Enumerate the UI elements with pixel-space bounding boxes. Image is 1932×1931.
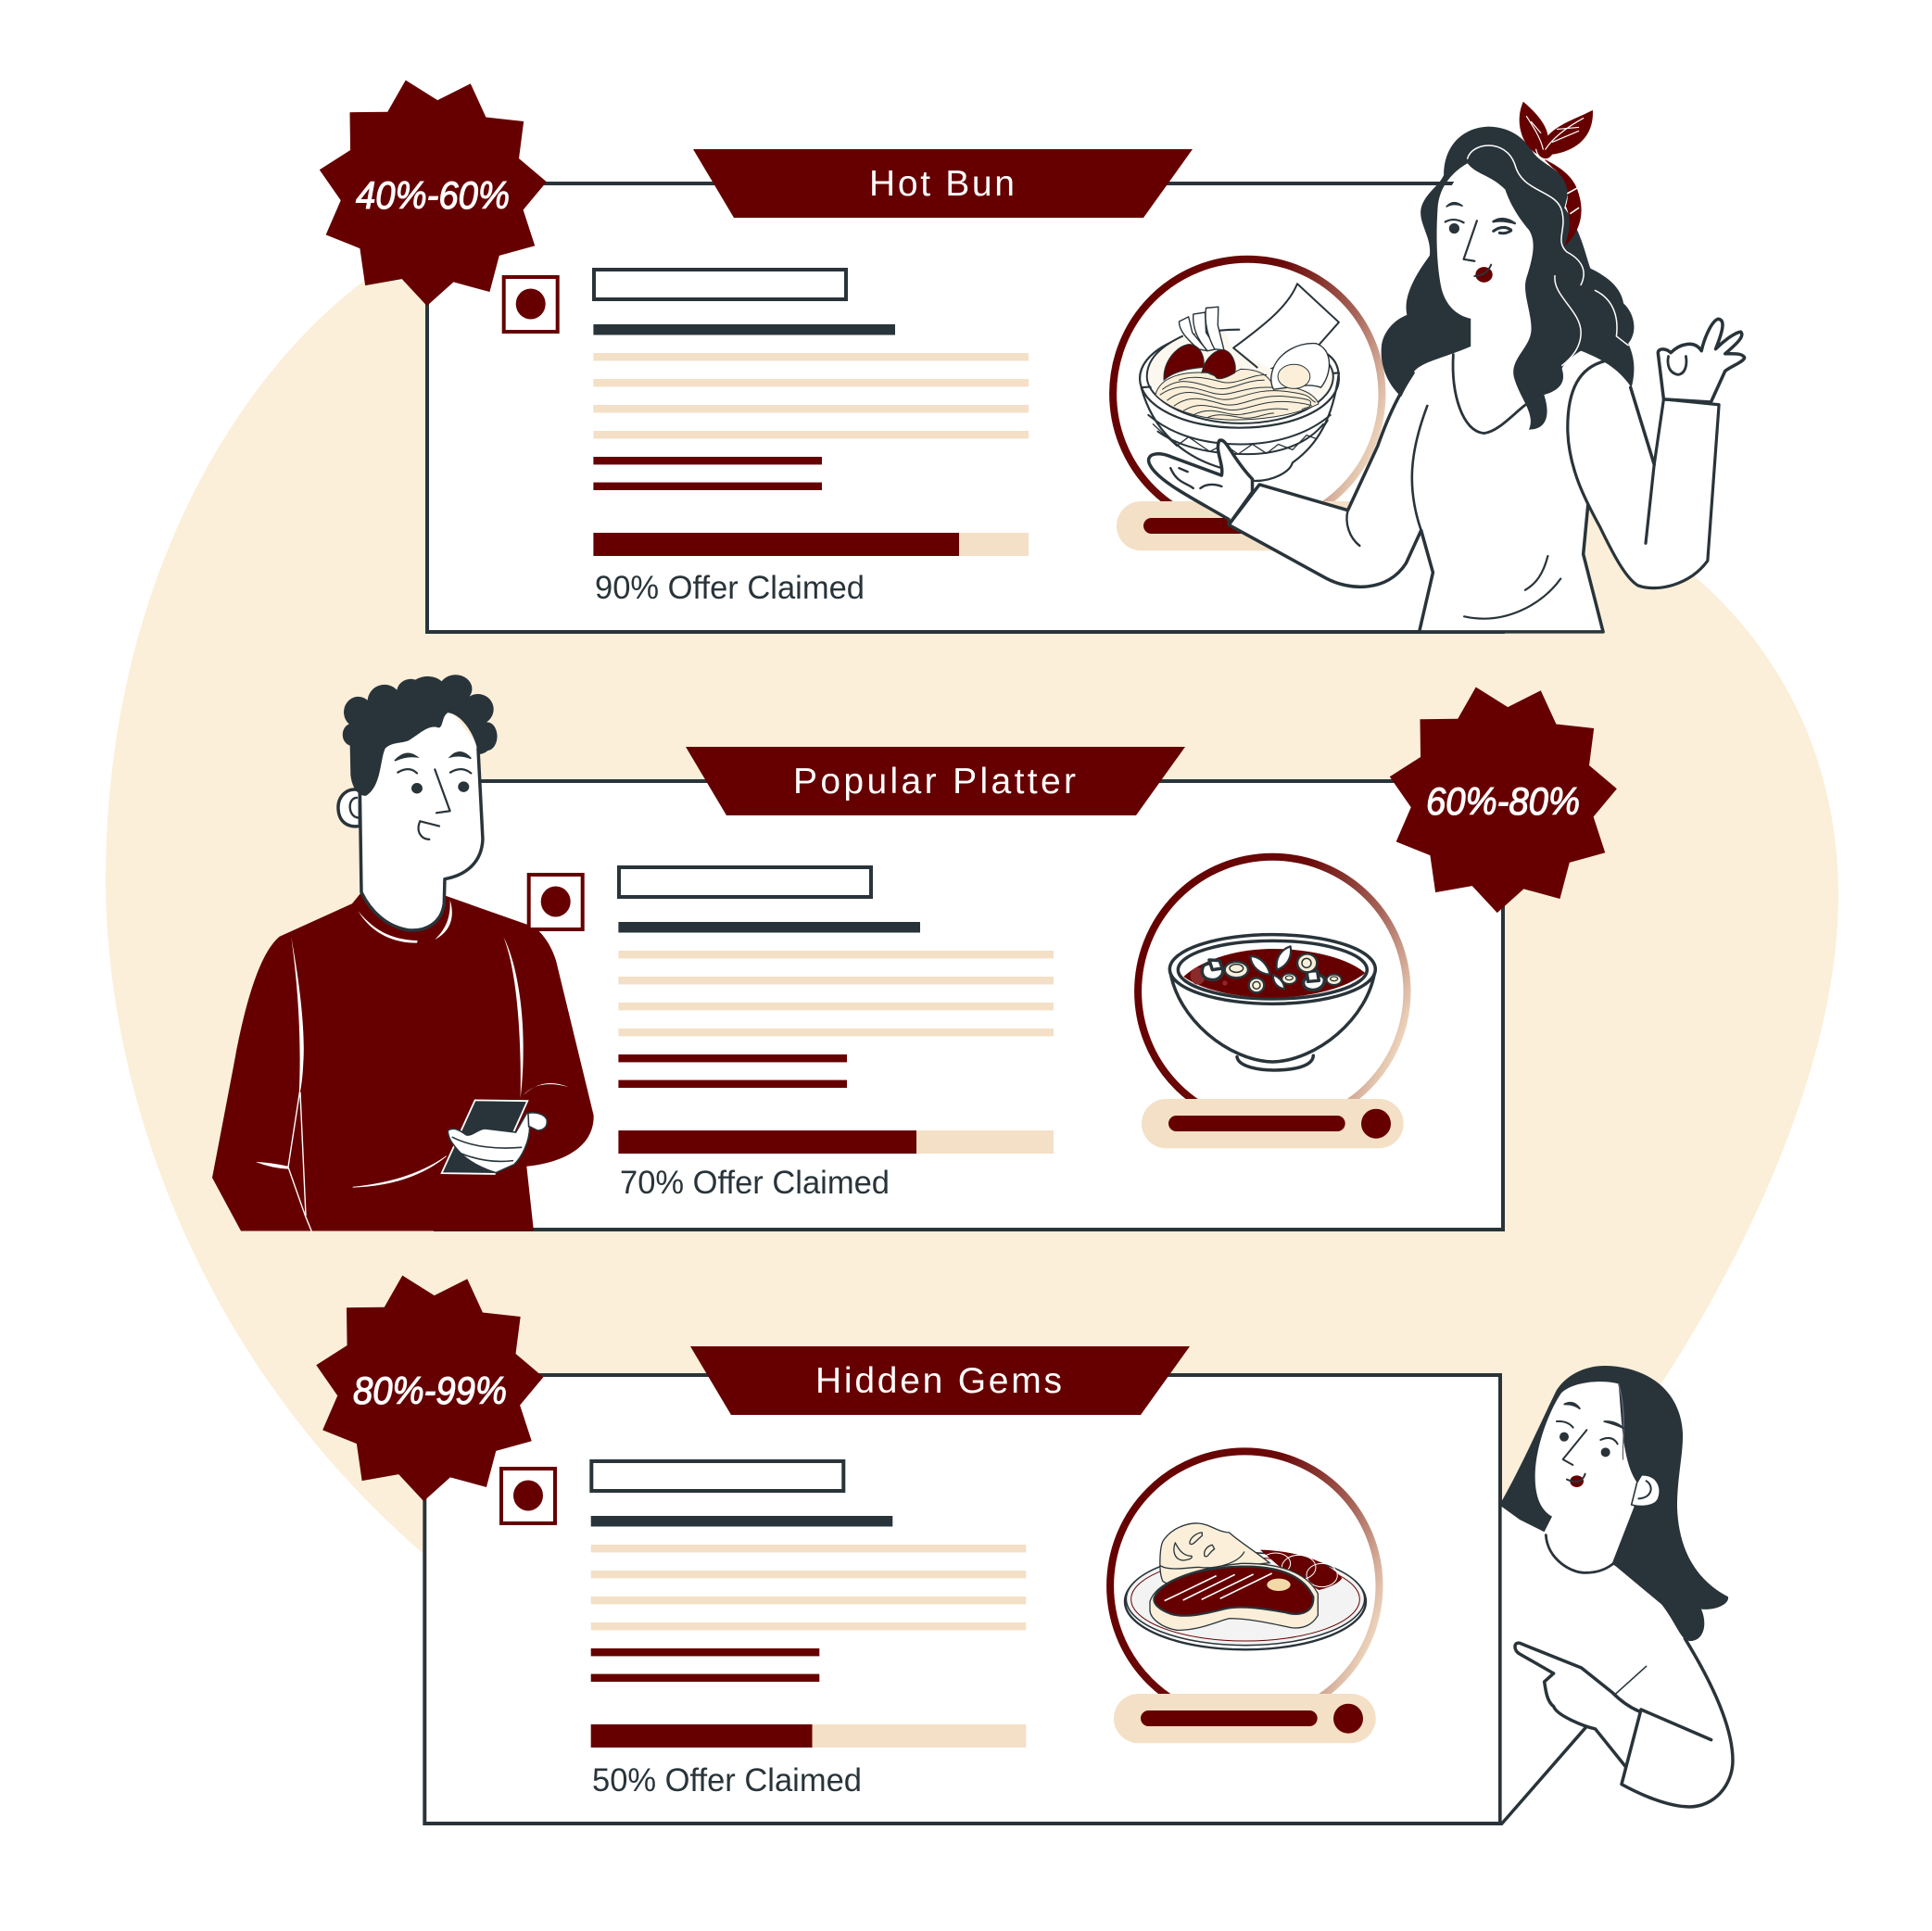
torso and arms — [1229, 340, 1719, 632]
hair — [1382, 127, 1634, 430]
banner: Hot Bun — [693, 149, 1193, 218]
hair — [1502, 1366, 1728, 1641]
badge: 40%-60%: 40%-60% — [356, 173, 510, 217]
face features — [395, 752, 471, 839]
hair highlights — [1468, 145, 1628, 365]
icon: ramen bowl — [1140, 284, 1339, 481]
progress bar 90% — [593, 533, 1029, 556]
progress label: 70% Offer Claimed — [620, 1165, 890, 1201]
ear — [1632, 1475, 1660, 1506]
head outline — [360, 749, 483, 930]
pill control — [1117, 501, 1379, 550]
banner: Hot Bun: Hot Bun — [869, 164, 1015, 204]
badge: 40%-60% — [320, 81, 547, 306]
text placeholder lines — [618, 867, 1054, 1088]
icon: square marker — [501, 1469, 555, 1523]
badge: 60%-80%: 60%-80% — [1426, 779, 1580, 823]
head and neck — [360, 707, 483, 930]
character: woman with headband presenting bowl — [1149, 102, 1745, 632]
pill control — [1114, 1694, 1376, 1743]
panel frame — [436, 781, 1503, 1230]
neck and arm outlines — [1502, 1383, 1733, 1824]
background blob — [106, 278, 1838, 1575]
panel: Hidden Gems — [316, 1276, 1500, 1824]
character: man with phone — [212, 675, 594, 1231]
text placeholder lines — [593, 270, 1029, 490]
face features — [1557, 1403, 1651, 1498]
phone — [442, 1100, 527, 1174]
progress label: 90% Offer Claimed — [595, 570, 865, 606]
hand — [448, 1113, 547, 1173]
face and neck — [1434, 160, 1538, 355]
headband — [1543, 158, 1582, 246]
badge: 80%-99%: 80%-99% — [353, 1369, 507, 1412]
dish ring — [1110, 1451, 1380, 1721]
badge: 60%-80% — [1390, 688, 1617, 913]
face features — [1446, 203, 1516, 283]
icon: steak plate — [1125, 1523, 1366, 1649]
progress label: 50% Offer Claimed — [592, 1762, 862, 1798]
panel frame — [424, 1375, 1500, 1824]
panel frame — [427, 183, 1503, 632]
panel: Hot Bun — [320, 81, 1503, 632]
hair — [343, 675, 498, 796]
icon: square marker — [504, 277, 558, 332]
leaves — [1520, 102, 1593, 159]
left hand — [1149, 440, 1253, 524]
badge: 80%-99% — [316, 1276, 543, 1501]
body outlines — [1229, 355, 1719, 632]
character: woman pointing — [1502, 1366, 1733, 1824]
banner: Hidden Gems: Hidden Gems — [815, 1361, 1062, 1401]
pill control — [1142, 1099, 1404, 1148]
dish ring — [1113, 259, 1383, 528]
body — [1502, 1507, 1733, 1824]
banner: Popular Platter — [686, 747, 1185, 815]
sweater — [212, 892, 594, 1231]
face — [1535, 1382, 1637, 1572]
panel: Popular Platter — [436, 688, 1617, 1230]
right hand OK gesture — [1658, 319, 1745, 402]
banner: Popular Platter: Popular Platter — [793, 762, 1076, 801]
banner: Hidden Gems — [690, 1346, 1190, 1415]
progress bar 70% — [618, 1130, 1054, 1154]
sweater highlights — [256, 900, 568, 1231]
icon: square marker — [529, 875, 583, 929]
progress bar 50% — [591, 1724, 1026, 1748]
icon: soup bowl — [1169, 935, 1375, 1070]
dish ring — [1138, 857, 1408, 1126]
ear — [338, 789, 360, 827]
text placeholder lines — [591, 1461, 1026, 1682]
